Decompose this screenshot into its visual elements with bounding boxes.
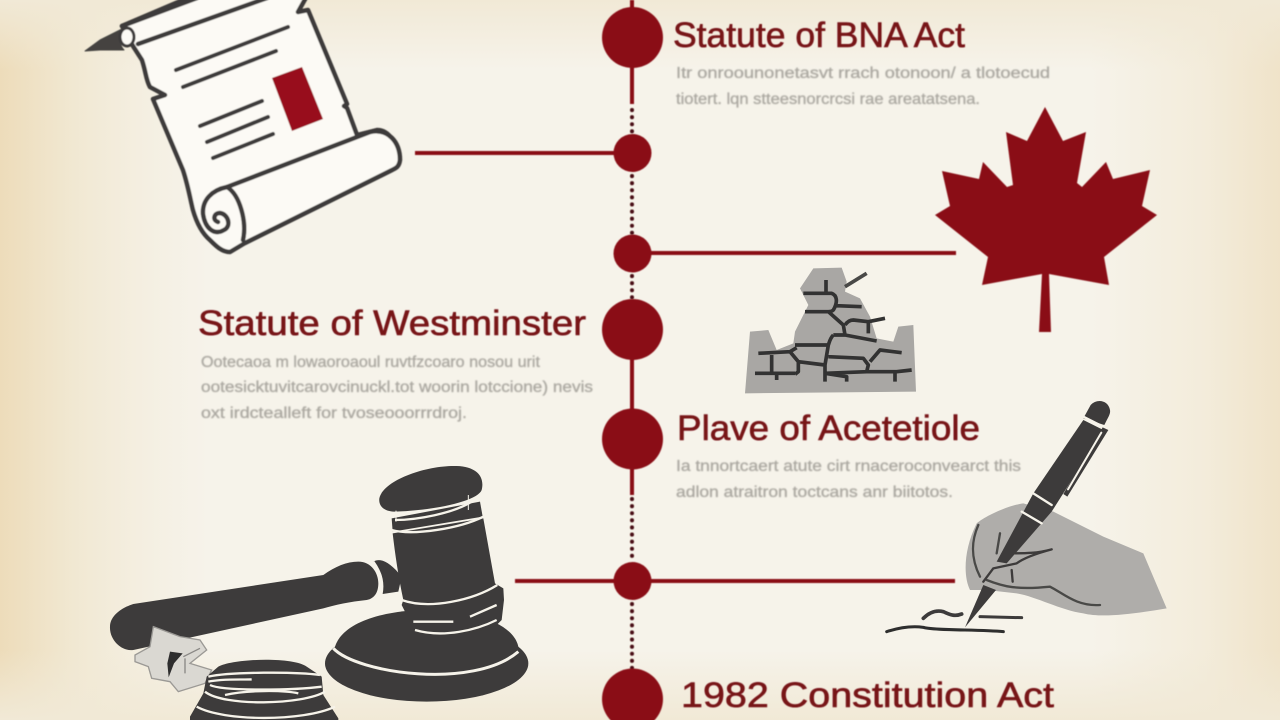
heading: Statute of BNA Act: Statute of BNA Act [673, 16, 965, 55]
heading: Statute of Westminster: Statute of Westminster [198, 304, 586, 343]
heading: 1982 Constitution Act: 1982 Constitution Act [681, 676, 1054, 715]
text block: BNA Act description: Itr onroounonetasvt rrach otonoon/ a tlotoecud [676, 65, 1050, 82]
text block: Acetetiole description: Ia tnnortcaert atute cirt rnaceroconvearct this [676, 458, 1021, 475]
sound block base [325, 625, 528, 702]
head [393, 518, 504, 634]
shard [135, 627, 212, 692]
text block: Westminster description: ootesicktuvitcarovcinuckl.tot woorin lotccione) nevis [201, 379, 593, 396]
icon: maple leaf [935, 107, 1157, 332]
text block: BNA Act description: tiotert. lqn stteesnorcrcsi rae areatatsena. [676, 91, 980, 108]
timeline spine [415, 0, 956, 668]
icon: hand writing with pen [887, 401, 1167, 632]
text block: Westminster description [201, 354, 593, 422]
icon: gavel [110, 466, 528, 720]
heading: Plave of Acetetiole: Plave of Acetetiole [677, 409, 980, 448]
timeline nodes [602, 7, 663, 720]
red seal [272, 67, 323, 131]
text block: Westminster description: oxt irdctealleft for tvoseooorrrdroj. [201, 405, 467, 422]
block [190, 660, 338, 720]
icon: crumbling wall [745, 268, 916, 393]
handle [110, 562, 378, 650]
icon: scroll [85, 0, 400, 252]
text block: Acetetiole description: adlon atraitron toctcans anr biitotos. [676, 484, 953, 501]
text block: Acetetiole description [676, 458, 1021, 501]
text block: Westminster description: Ootecaoa m lowaoroaoul ruvtfzcoaro nosou urit [201, 354, 541, 371]
text block: BNA Act description [676, 65, 1050, 108]
connector lines [415, 153, 956, 581]
